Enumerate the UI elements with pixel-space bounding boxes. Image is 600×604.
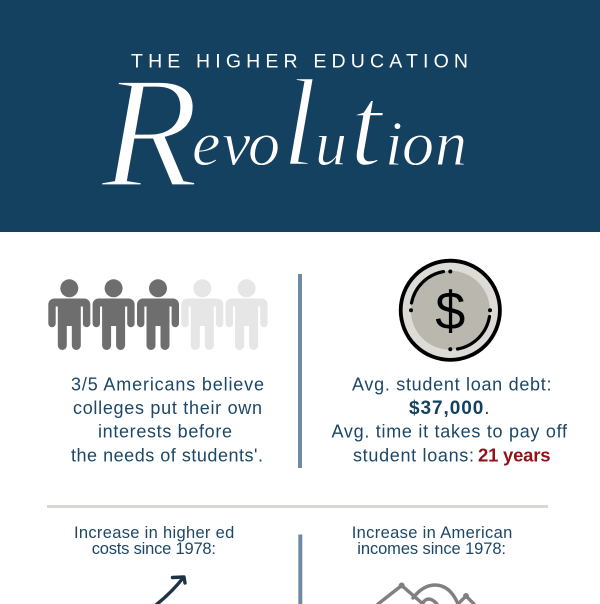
text: americans believe: 3/5 Americans believe — [71, 374, 264, 394]
panel: public opinion of colleges — [48, 279, 268, 466]
title: the higher education: THE HIGHER EDUCATION — [131, 50, 468, 72]
panel: american incomes — [352, 524, 512, 604]
text: higher ed costs heading: Increase in higher ed — [74, 524, 234, 542]
header banner — [0, 0, 600, 232]
title: revolution: R — [100, 43, 199, 221]
text: loan debt and payoff time: $37,000. — [409, 398, 490, 419]
title: revolution: evo — [192, 108, 280, 179]
text: loan debt and payoff time: student loans: — [353, 446, 474, 466]
panel: higher ed costs — [74, 524, 234, 604]
text: american incomes heading: incomes since 1978: — [357, 540, 506, 558]
divider: horizontal rule — [47, 505, 548, 508]
title: revolution: ion — [385, 108, 467, 179]
text: americans believe — [71, 374, 264, 466]
text: loan debt and payoff time: Avg. time it takes to pay off — [332, 422, 568, 442]
panel: student loan debt — [332, 261, 568, 466]
banner background — [0, 0, 600, 232]
title: revolution: u — [315, 108, 347, 179]
text: higher ed costs heading: costs since 1978: — [92, 540, 216, 558]
divider: lower column — [298, 534, 302, 604]
text: american incomes heading: Increase in American — [352, 524, 512, 542]
title: revolution: l — [282, 55, 317, 193]
text: americans believe: the needs of students'. — [71, 446, 263, 466]
icon: rising arrow — [156, 577, 185, 604]
icon: dollar coin: $ — [435, 282, 465, 342]
text: americans believe: colleges put their own — [73, 398, 262, 418]
icon: five people, three highlighted — [48, 279, 268, 350]
text: loan debt and payoff time — [332, 374, 568, 466]
icon: income line chart — [378, 582, 474, 604]
title: revolution: t — [350, 63, 385, 190]
text: americans believe: interests before — [98, 422, 232, 442]
text: loan debt and payoff time: 21 years — [478, 444, 550, 466]
text: american incomes heading — [352, 524, 512, 558]
divider: upper column — [298, 274, 302, 468]
text: higher ed costs heading — [74, 524, 234, 558]
text: loan debt and payoff time: Avg. student loan debt: — [352, 374, 552, 394]
icon: dollar coin — [401, 261, 500, 360]
